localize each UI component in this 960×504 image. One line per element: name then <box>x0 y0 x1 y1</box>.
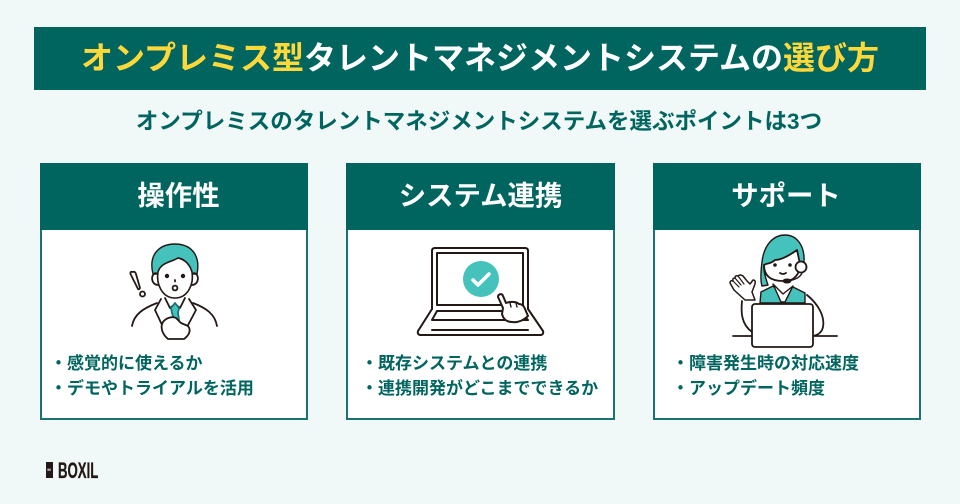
panel: システム連携 <box>346 163 615 420</box>
title banner: オンプレミス型タレントマネジメントシステムの選び方 <box>81 40 879 76</box>
list: サポート points: ・アップデート頻度 <box>672 378 825 398</box>
face <box>158 258 192 298</box>
list: サポート points: ・障害発生時の対応速度 <box>672 354 859 373</box>
heading: 操作性 <box>40 163 308 230</box>
hair <box>152 244 198 274</box>
list: システム連携 points: ・連携開発がどこまでできるか <box>361 378 598 398</box>
list: 操作性 points <box>50 354 254 398</box>
heading: システム連携 <box>346 163 615 230</box>
list: システム連携 points <box>361 354 598 398</box>
hand <box>162 317 190 339</box>
list: 操作性 points: ・感覚的に使えるか <box>50 354 202 373</box>
heading: システム連携: システム連携 <box>399 180 562 211</box>
laptop <box>752 304 813 347</box>
panel: 操作性 <box>40 163 308 420</box>
heading: サポート <box>653 163 921 230</box>
hair <box>761 235 804 286</box>
list: サポート points <box>672 354 859 398</box>
pointing hand <box>498 294 528 322</box>
raised hand <box>730 275 755 300</box>
face <box>764 250 800 281</box>
tie <box>171 303 180 327</box>
panel: サポート <box>653 163 921 420</box>
laptop base <box>418 309 543 335</box>
heading: サポート: サポート <box>731 180 841 211</box>
exclamation mark <box>130 272 140 289</box>
list: 操作性 points: ・デモやトライアルを活用 <box>50 378 254 398</box>
logo mark <box>46 462 52 478</box>
laptop lid <box>432 248 528 309</box>
logo wordmark: BOXIL <box>58 458 98 483</box>
heading: 操作性: 操作性 <box>137 180 220 211</box>
headset <box>796 262 806 272</box>
suit <box>132 303 217 326</box>
logo: BOXIL <box>46 458 98 483</box>
vest <box>760 286 805 303</box>
arms and desk <box>733 295 837 336</box>
subtitle: オンプレミスのタレントマネジメントシステムを選ぶポイントは3つ <box>136 109 822 134</box>
title banner <box>34 27 926 90</box>
check circle <box>463 261 499 297</box>
logo mark: M <box>47 467 51 472</box>
list: システム連携 points: ・既存システムとの連携 <box>361 354 547 373</box>
